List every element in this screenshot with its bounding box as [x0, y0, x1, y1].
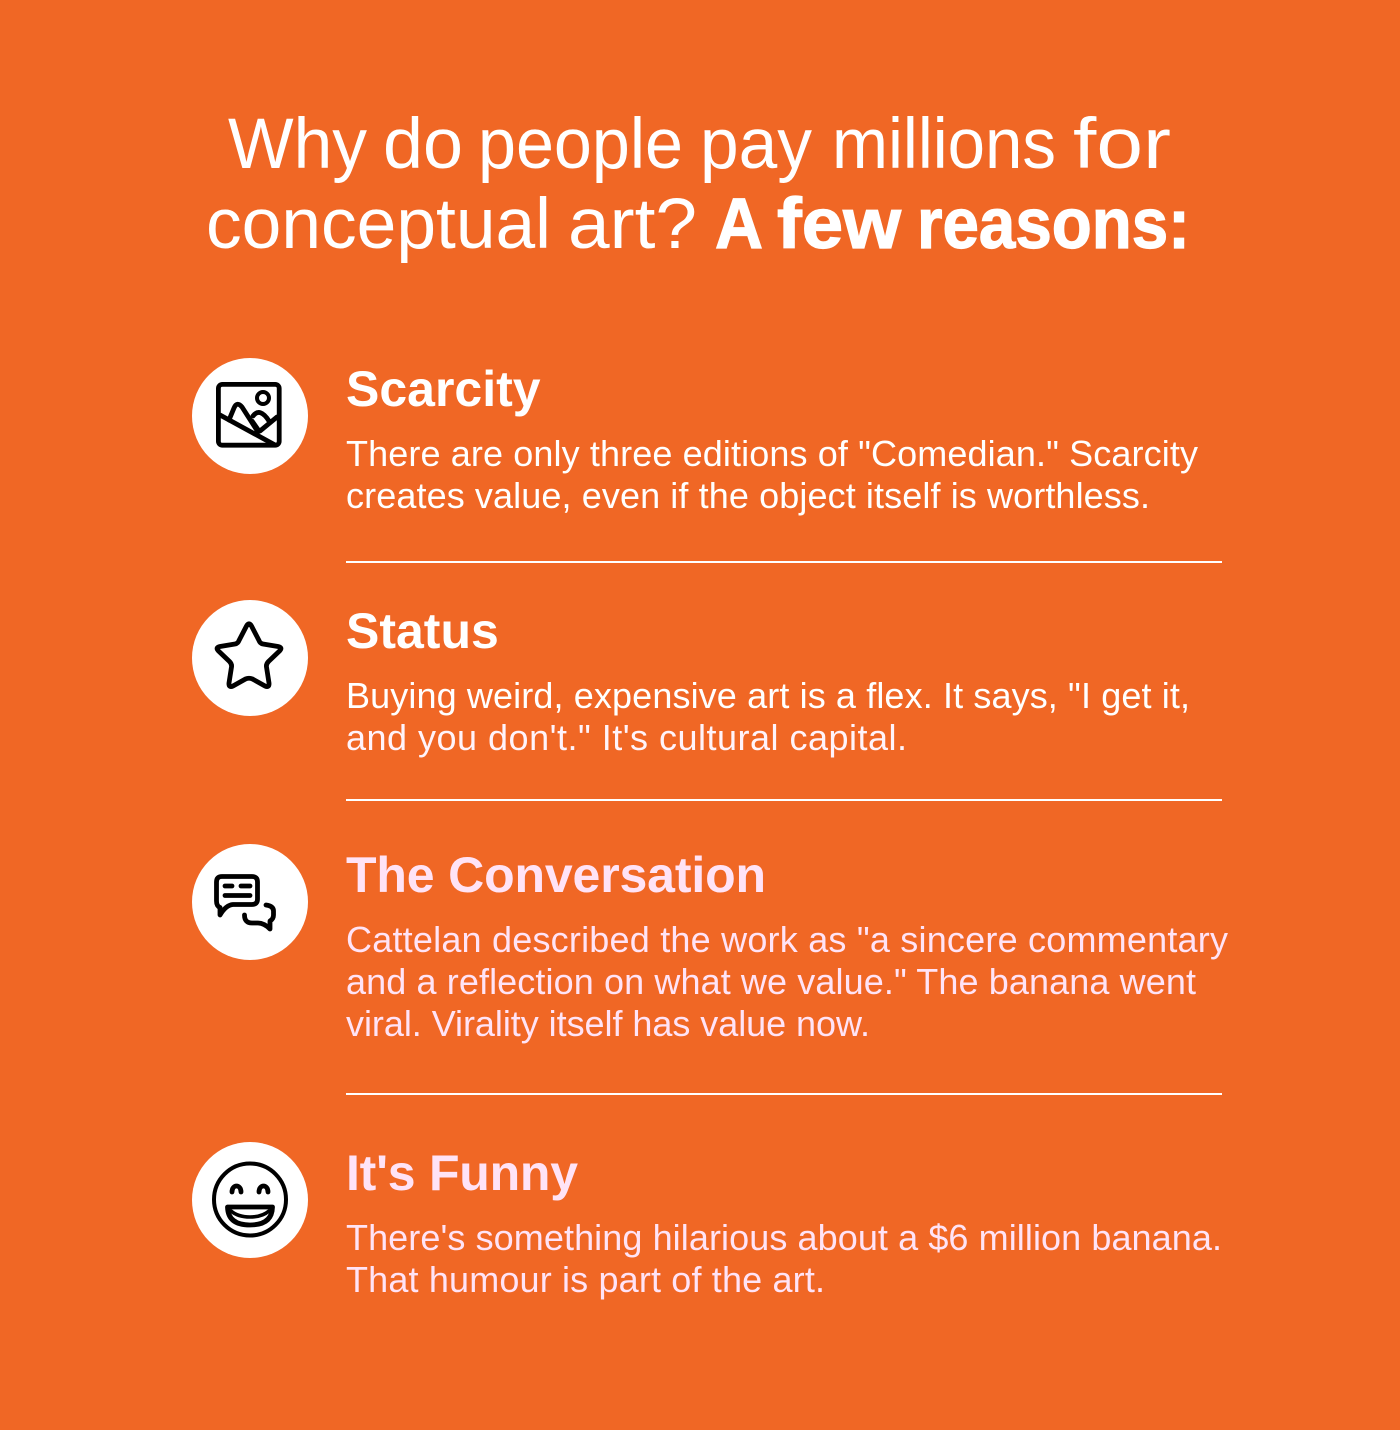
- title: for: [1073, 105, 1171, 184]
- text: it's funny: [346, 1217, 1222, 1300]
- heading: status: Status: [346, 603, 499, 659]
- title: do: [383, 105, 463, 184]
- icon: star: [192, 600, 308, 716]
- icon: picture frame: [192, 358, 308, 474]
- title: A: [715, 185, 763, 264]
- text: it's funny: There's something hilarious about a $6 million banana.: [346, 1217, 1222, 1258]
- panel: scarcity: [192, 358, 1198, 516]
- text: it's funny: That humour is part of the art.: [346, 1259, 825, 1300]
- title: art?: [568, 185, 697, 264]
- text: the conversation: viral. Virality itself has value now.: [346, 1003, 870, 1044]
- text: the conversation: [346, 919, 1228, 1044]
- text: the conversation: and a reflection on what we value." The banana went: [346, 961, 1196, 1002]
- title: reasons:: [917, 185, 1190, 264]
- text: status: Buying weird, expensive art is a flex. It says, "I get it,: [346, 675, 1190, 716]
- title: millions: [832, 105, 1056, 184]
- text: scarcity: [346, 433, 1198, 516]
- title: Why: [228, 105, 367, 184]
- heading: the conversation: The Conversation: [346, 847, 766, 903]
- title: people: [478, 105, 683, 184]
- icon: laughing face: [192, 1142, 308, 1258]
- text: scarcity: There are only three editions of "Comedian." Scarcity: [346, 433, 1198, 474]
- icon: speech bubbles: [192, 844, 308, 960]
- text: the conversation: Cattelan described the work as "a sincere commentary: [346, 919, 1228, 960]
- heading: it's funny: It's Funny: [346, 1145, 578, 1201]
- panel: status: [192, 600, 1190, 758]
- title: pay: [700, 105, 812, 184]
- title: few: [777, 185, 902, 264]
- text: status: [346, 675, 1190, 758]
- text: status: and you don't." It's cultural capital.: [346, 717, 907, 758]
- title: conceptual: [206, 185, 551, 264]
- panel: the conversation: [192, 844, 1228, 1044]
- panel: it's funny: [192, 1142, 1222, 1300]
- text: scarcity: creates value, even if the object itself is worthless.: [346, 475, 1150, 516]
- title: [206, 105, 1190, 264]
- heading: scarcity: Scarcity: [346, 361, 541, 417]
